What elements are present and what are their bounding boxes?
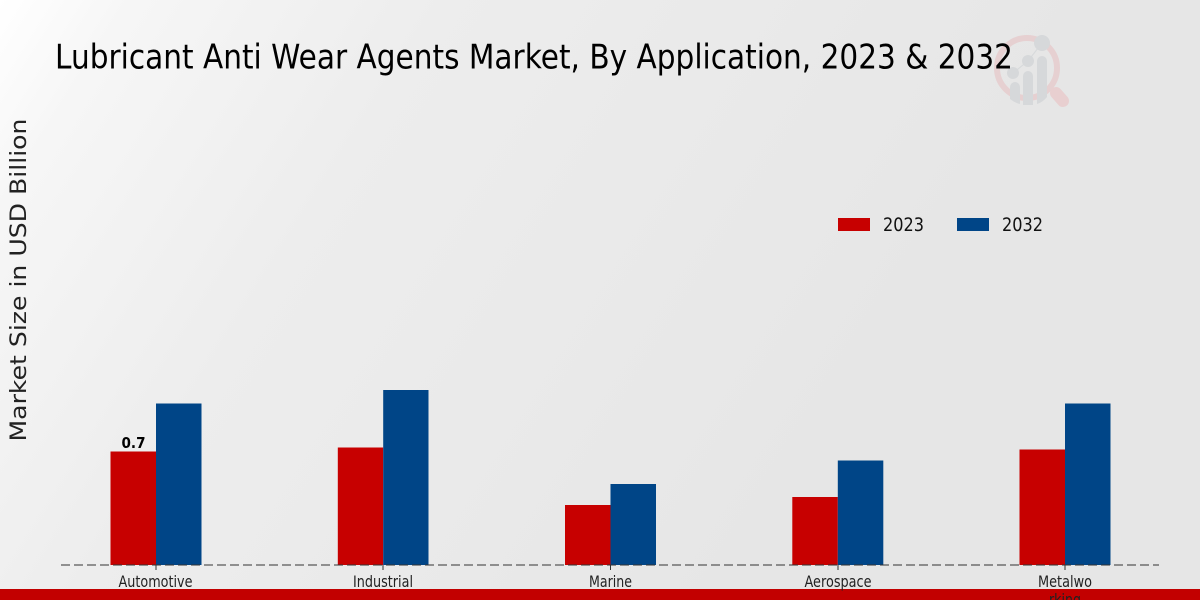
bar chart xyxy=(61,390,1159,600)
legend: 2032 xyxy=(1002,214,1043,236)
footer bar xyxy=(0,589,1200,600)
category labels: Marine xyxy=(589,572,632,591)
value label: 0.7 xyxy=(122,434,146,452)
bars: Aerospace xyxy=(792,460,883,565)
logo watermark xyxy=(997,35,1063,105)
category labels: Aerospace xyxy=(804,572,872,591)
legend xyxy=(838,214,1043,236)
category labels: Industrial xyxy=(353,572,413,591)
bars: Industrial xyxy=(338,390,428,565)
category labels: Automotive xyxy=(118,572,192,591)
bars: Metalworking xyxy=(1020,404,1110,565)
y axis label: Market Size in USD Billion xyxy=(6,118,32,442)
ticks xyxy=(156,565,1065,570)
category labels: Metalwo xyxy=(1038,572,1092,591)
legend: 2023 xyxy=(883,214,924,236)
baseline xyxy=(61,564,1159,566)
bars: Marine xyxy=(565,484,656,565)
bars: Automotive xyxy=(110,404,202,565)
category labels xyxy=(118,572,1092,600)
title: Lubricant Anti Wear Agents Market, By Application, 2023 & 2032 xyxy=(55,38,1013,78)
